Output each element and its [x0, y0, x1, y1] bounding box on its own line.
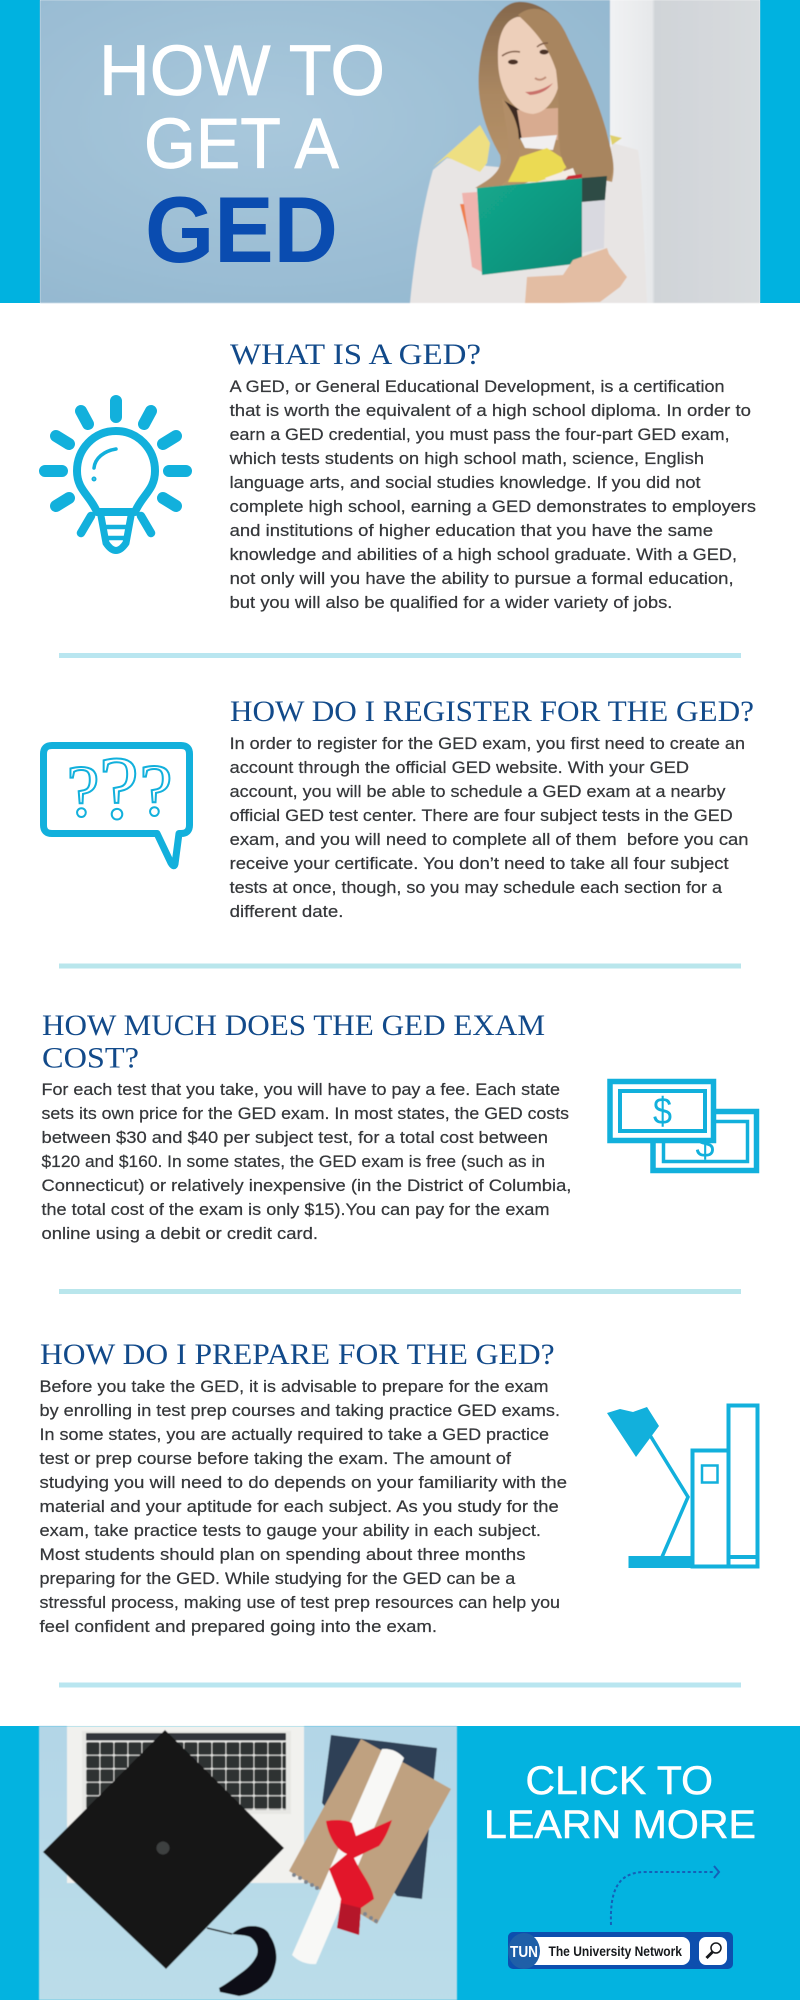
body text: For each test that you take, you will have to pay a fee. Each state [42, 1080, 560, 1099]
body text: earn a GED credential, you must pass the four-part GED exam, [230, 425, 730, 444]
body text: by enrolling in test prep courses and taking practice GED exams. [40, 1401, 560, 1420]
body text [40, 1377, 567, 1636]
body text: Before you take the GED, it is advisable to prepare for the exam [40, 1377, 548, 1396]
call to action: click to learn more: LEARN MORE [484, 1803, 756, 1847]
body text: receive your certificate. You don’t need to take all four subject [230, 854, 729, 873]
section: what is a GED [45, 338, 756, 612]
title: how to get a GED [99, 32, 385, 282]
body text: but you will also be qualified for a wider variety of jobs. [230, 593, 672, 612]
body text: not only will you have the ability to pursue a formal education, [230, 569, 734, 588]
body text: tests at once, though, so you may schedule each section for a [230, 878, 723, 897]
heading: HOW DO I PREPARE FOR THE GED? [40, 1338, 555, 1371]
body text: In order to register for the GED exam, you first need to create an [230, 734, 745, 753]
body text: that is worth the equivalent of a high school diploma. In order to [230, 401, 751, 420]
body text: A GED, or General Educational Development, is a certification [230, 377, 725, 396]
section: how much does the GED exam cost [42, 1009, 756, 1243]
heading: HOW DO I REGISTER FOR THE GED? [230, 695, 754, 728]
icon: dollar bills: $ [696, 1124, 714, 1166]
icon: speech bubble with question marks: ? [140, 750, 172, 832]
footer banner [0, 1726, 800, 2000]
body text: between $30 and $40 per subject test, for a total cost between [42, 1128, 548, 1147]
body text: complete high school, earning a GED demonstrates to employers [230, 497, 756, 516]
body text: test or prep course before taking the exam. The amount of [40, 1449, 511, 1468]
body text: sets its own price for the GED exam. In most states, the GED costs [42, 1104, 569, 1123]
call to action: click to learn more [484, 1759, 756, 1847]
title: how to get a GED: GED [145, 177, 338, 282]
section: how do I register [44, 695, 754, 921]
title: how to get a GED: GET A [144, 105, 340, 184]
icon: dollar bills: $ [653, 1091, 672, 1133]
body text: account, you will be able to schedule a GED exam at a nearby [230, 782, 726, 801]
body text: Most students should plan on spending about three months [40, 1545, 526, 1564]
icon: speech bubble with question marks [44, 739, 190, 866]
body text: online using a debit or credit card. [42, 1224, 318, 1243]
heading: HOW MUCH DOES THE GED EXAM [42, 1009, 545, 1042]
body text [230, 734, 749, 921]
body text: feel confident and prepared going into the exam. [40, 1617, 437, 1636]
icon: light bulb [45, 401, 186, 550]
heading: WHAT IS A GED? [230, 338, 481, 371]
body text: stressful process, making use of test prep resources can help you [40, 1593, 560, 1612]
body text: exam, take practice tests to gauge your ability in each subject. [40, 1521, 541, 1540]
body text: knowledge and abilities of a high school graduate. With a GED, [230, 545, 737, 564]
body text: the total cost of the exam is only $15).You can pay for the exam [42, 1200, 550, 1219]
body text: $120 and $160. In some states, the GED exam is free (such as in [42, 1152, 545, 1171]
body text: official GED test center. There are four subject tests in the GED [230, 806, 733, 825]
heading [42, 1009, 545, 1074]
logo: the university network search bar: The University Network [548, 1943, 682, 1959]
call to action: click to learn more: CLICK TO [526, 1759, 713, 1803]
body text: language arts, and social studies knowledge. If you did not [230, 473, 701, 492]
footer photo: graduation cap, laptop and diploma [39, 1726, 457, 2000]
body text: studying you will need to do depends on your familiarity with the [40, 1473, 567, 1492]
body text: preparing for the GED. While studying for the GED can be a [40, 1569, 516, 1588]
header banner [0, 0, 800, 303]
icon: magnifying glass [706, 1943, 721, 1958]
logo: the university network search bar [508, 1932, 733, 1969]
icon: dollar bills [610, 1082, 756, 1170]
icon: speech bubble with question marks: ? [99, 739, 139, 838]
body text: which tests students on high school math, science, English [229, 449, 704, 468]
header photo: student holding folders [40, 0, 760, 303]
footer background [0, 1726, 800, 2000]
header side bars [0, 0, 800, 303]
body text: account through the official GED website. With your GED [230, 758, 689, 777]
body text: and institutions of higher education that you have the same [230, 521, 713, 540]
section: how do I prepare [40, 1338, 759, 1636]
heading: COST? [42, 1042, 139, 1074]
arrow: dotted curve to the right [611, 1866, 719, 1925]
logo: the university network search bar: TUN [510, 1944, 538, 1961]
body text: exam, and you will need to complete all of them before you can [230, 830, 749, 849]
title: how to get a GED: HOW TO [99, 32, 385, 111]
body text: different date. [230, 902, 343, 921]
body text: Connecticut) or relatively inexpensive (in the District of Columbia, [42, 1176, 571, 1195]
icon: speech bubble with question marks: ? [67, 751, 99, 833]
body text: In some states, you are actually required to take a GED practice [40, 1425, 549, 1444]
icon: desk lamp and books [607, 1406, 759, 1568]
body text: material and your aptitude for each subject. As you study for the [40, 1497, 559, 1516]
body text [42, 1080, 571, 1243]
body text [229, 377, 756, 612]
